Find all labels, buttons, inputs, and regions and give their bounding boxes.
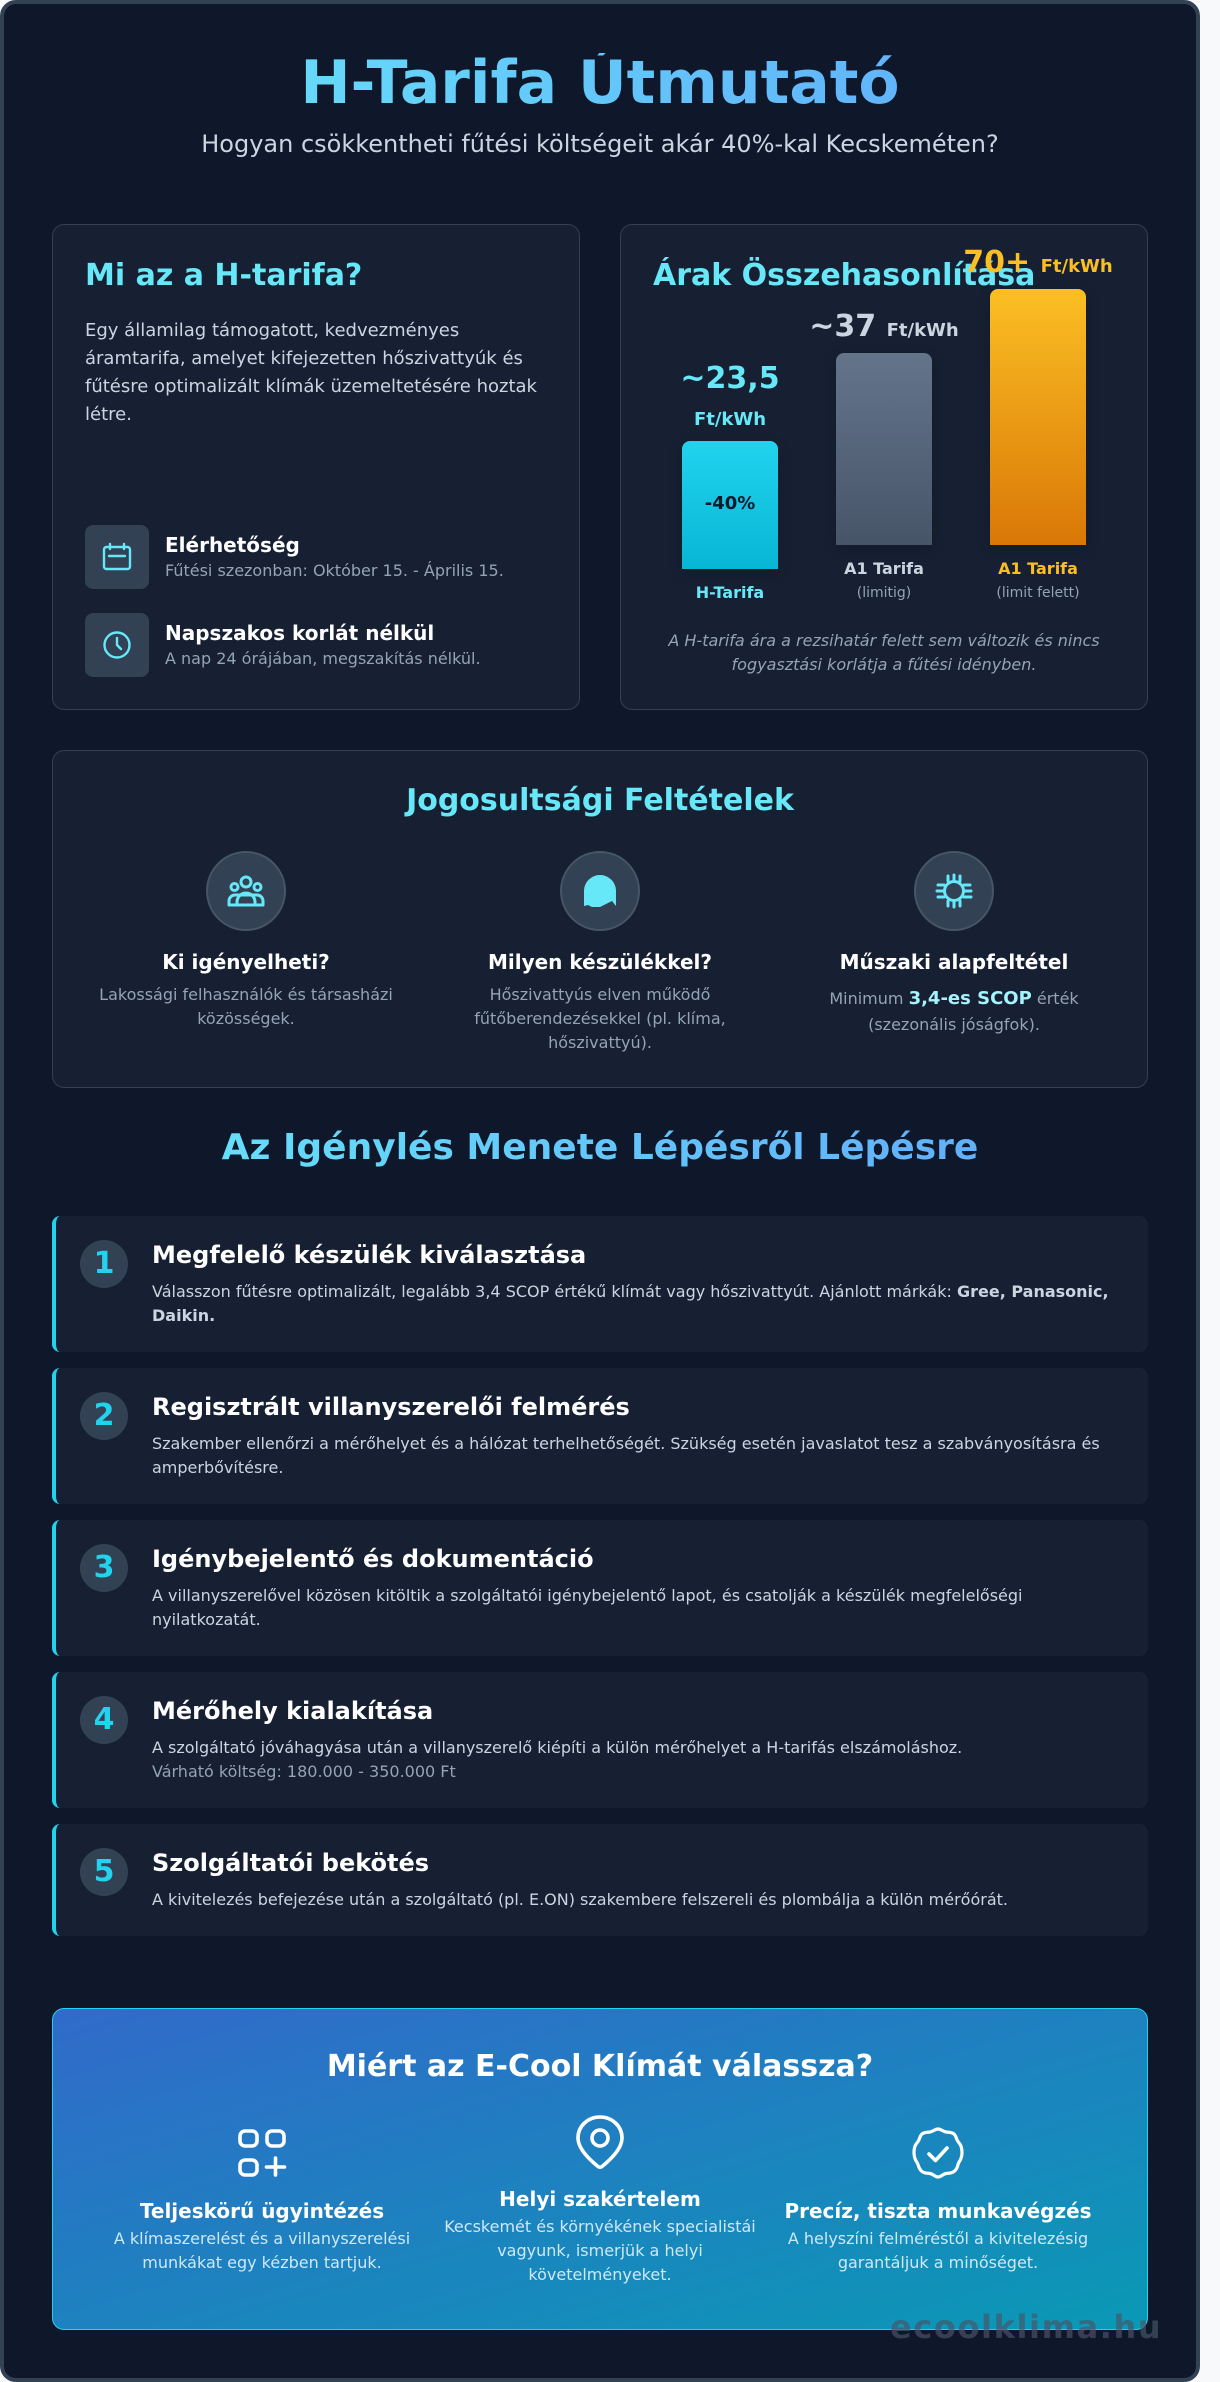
step 3: nyilatkozatát. <box>152 1610 261 1629</box>
feature: no time limit: Napszakos korlát nélkül <box>165 621 434 645</box>
icon: calendar <box>85 525 149 589</box>
benefit: precise work: garantáljuk a minőséget. <box>838 2253 1038 2272</box>
eligibility: who: Lakossági felhasználók és társasházi <box>99 985 393 1004</box>
eligibility: who: közösségek. <box>197 1009 295 1028</box>
label: A1 above limit <box>996 559 1080 601</box>
value: A1 up to limit: ~37 Ft/kWh <box>809 309 959 344</box>
label: A1 up to limit: A1 Tarifa <box>844 559 924 578</box>
text block: H-tariff description: fűtésre optimalizált klímák üzemeltetésére hoztak <box>85 376 537 397</box>
step 3 <box>52 1520 1148 1656</box>
feature: no time limit <box>165 621 481 668</box>
heading: price comparison: Árak Összehasonlítása <box>653 258 1035 293</box>
panel: eligibility <box>52 750 1148 1088</box>
eligibility: which device: Hőszivattyús elven működő <box>490 985 710 1004</box>
bar: H-Tarifa <box>682 441 778 569</box>
icon: quality badge <box>912 2127 964 2179</box>
step 2: Regisztrált villanyszerelői felmérés <box>152 1393 630 1421</box>
eligibility: technical: Műszaki alapfeltétel <box>840 950 1068 974</box>
step 1 <box>52 1216 1148 1352</box>
step 2: Szakember ellenőrzi a mérőhelyet és a hálózat terhelhetőségét. Szükség esetén javaslatot tesz a szabványosításra és <box>152 1434 1100 1453</box>
label: A1 above limit: (limit felett) <box>996 585 1080 601</box>
step 5 <box>52 1824 1148 1936</box>
icon: chip <box>914 851 994 931</box>
icon: clock <box>85 613 149 677</box>
benefit: full administration: Teljeskörű ügyintézés <box>140 2199 384 2223</box>
text block: H-tariff description: áramtarifa, amelyet kifejezetten hőszivattyúk és <box>85 348 523 369</box>
benefit: precise work: A helyszíni felméréstől a kivitelezésig <box>788 2229 1088 2248</box>
eligibility: which device: Milyen készülékkel? <box>488 950 712 974</box>
text block: H-tariff description: létre. <box>85 404 132 425</box>
subtitle: Hogyan csökkentheti fűtési költségeit akár 40%-kal Kecskeméten? <box>201 130 999 158</box>
benefit: local expertise: Kecskemét és környékének specialistái <box>444 2217 756 2236</box>
eligibility: who: Ki igényelheti? <box>162 950 330 974</box>
value: H-Tarifa price: ~23,5 <box>680 361 780 396</box>
eligibility: who <box>99 950 393 1028</box>
icon: people group <box>206 851 286 931</box>
step 5: Szolgáltatói bekötés <box>152 1849 429 1877</box>
step 1: Daikin. <box>152 1306 215 1325</box>
step 5: A kivitelezés befejezése után a szolgáltató (pl. E.ON) szakembere felszereli és plombálja a külön mérőórát. <box>152 1890 1008 1909</box>
heading: eligibility: Jogosultsági Feltételek <box>406 783 794 818</box>
feature: availability <box>165 533 504 580</box>
label: A1 up to limit <box>844 559 924 601</box>
benefit: full administration: A klímaszerelést és a villanyszerelési <box>114 2229 410 2248</box>
bar: A1 up to limit <box>836 353 932 545</box>
heading: process <box>52 1128 1148 1168</box>
step 5: 5 <box>94 1854 114 1889</box>
benefit: precise work: Precíz, tiszta munkavégzés <box>784 2199 1092 2223</box>
eligibility: technical: (szezonális jóságfok). <box>868 1014 1040 1034</box>
panel: what is H-tariff <box>52 224 580 710</box>
benefit: local expertise: követelményeket. <box>528 2265 672 2284</box>
feature: availability: Elérhetőség <box>165 533 300 557</box>
heading: why E-Cool: Miért az E-Cool Klímát válassza? <box>327 2049 873 2084</box>
label: A1 up to limit: (limitig) <box>857 585 911 601</box>
text block: H-tariff description <box>85 320 537 425</box>
step 3: 3 <box>94 1550 114 1585</box>
eligibility: which device: hőszivattyú). <box>548 1033 652 1052</box>
benefit: local expertise: vagyunk, ismerjük a helyi <box>497 2241 703 2260</box>
step 1: Megfelelő készülék kiválasztása <box>152 1241 586 1269</box>
label: A1 above limit: A1 Tarifa <box>998 559 1078 578</box>
feature: no time limit: A nap 24 órájában, megszakítás nélkül. <box>165 649 481 668</box>
step 2 <box>52 1368 1148 1504</box>
step 3: A villanyszerelővel közösen kitöltik a szolgáltatói igénybejelentő lapot, és csatolják a készülék megfelelőségi <box>152 1586 1022 1605</box>
feature: availability: Fűtési szezonban: Október 15. - Április 15. <box>165 561 504 580</box>
icon: apps <box>238 2129 286 2177</box>
label: H-Tarifa: H-Tarifa <box>696 583 764 602</box>
bar: A1 above limit <box>990 289 1086 545</box>
heading: what is H-tariff: Mi az a H-tarifa? <box>85 258 362 293</box>
step 1: 1 <box>94 1246 114 1281</box>
step 1: Válasszon fűtésre optimalizált, legalább 3,4 SCOP értékű klímát vagy hőszivattyút. Ajánlott márkák: Gree, Panasonic, <box>152 1282 1109 1301</box>
benefit: local expertise <box>444 2187 756 2284</box>
note: comparison footnote: A H-tarifa ára a rezsihatár felett sem változik és nincs <box>668 631 1100 650</box>
panel: price comparison <box>620 224 1148 710</box>
benefit: full administration: munkákat egy kézben tartjuk. <box>142 2253 382 2272</box>
note: comparison footnote <box>668 631 1100 674</box>
step 4: Mérőhely kialakítása <box>152 1697 433 1725</box>
step 2: 2 <box>94 1398 114 1433</box>
step 3: Igénybejelentő és dokumentáció <box>152 1545 594 1573</box>
step 2: amperbővítésre. <box>152 1458 283 1477</box>
panel: why E-Cool <box>52 2008 1148 2330</box>
icon: location pin <box>576 2115 624 2169</box>
step 4: Várható költség: 180.000 - 350.000 Ft <box>152 1762 456 1781</box>
watermark: ecoolklima.hu <box>890 2308 1162 2346</box>
bar label: -40%: -40% <box>705 493 755 514</box>
value: H-Tarifa price <box>680 361 780 430</box>
note: comparison footnote: fogyasztási korlátja a fűtési idényben. <box>732 655 1036 674</box>
value: A1 above limit: 70+ Ft/kWh <box>963 245 1113 280</box>
eligibility: technical <box>829 950 1079 1034</box>
title <box>52 53 1148 113</box>
benefit: local expertise: Helyi szakértelem <box>499 2187 701 2211</box>
icon: device <box>560 851 640 931</box>
step 4: A szolgáltató jóváhagyása után a villanyszerelő kiépíti a külön mérőhelyet a H-tarifás elszámoláshoz. <box>152 1738 962 1757</box>
eligibility: which device: fűtőberendezésekkel (pl. klíma, <box>474 1009 726 1028</box>
step 4 <box>52 1672 1148 1808</box>
text block: H-tariff description: Egy államilag támogatott, kedvezményes <box>85 320 459 341</box>
eligibility: technical: Minimum 3,4-es SCOP érték <box>829 988 1079 1009</box>
benefit: full administration <box>114 2199 410 2272</box>
heading: process: Az Igénylés Menete Lépésről Lépésre <box>222 1127 978 1168</box>
benefit: precise work <box>784 2199 1092 2272</box>
eligibility: which device <box>474 950 726 1052</box>
title: H-Tarifa Útmutató <box>300 48 900 118</box>
value: H-Tarifa price: Ft/kWh <box>694 409 766 430</box>
step 4: 4 <box>94 1702 114 1737</box>
